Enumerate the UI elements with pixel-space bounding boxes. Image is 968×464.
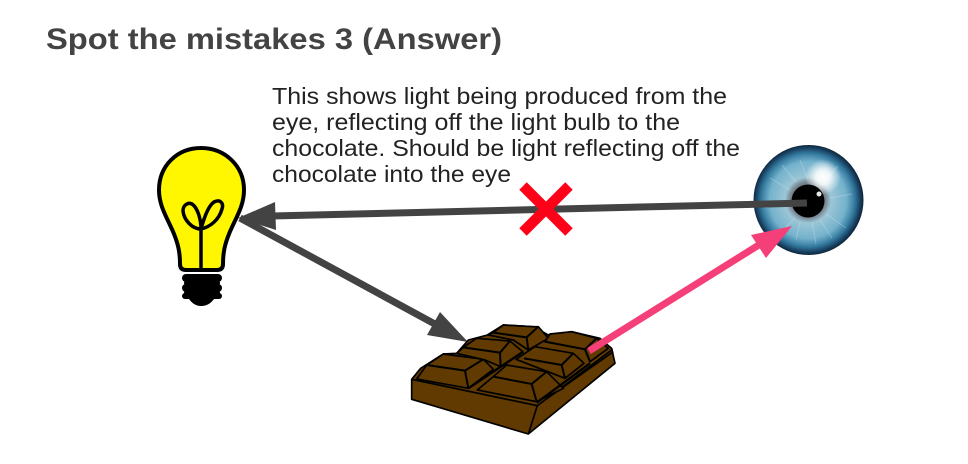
arrow: chocolate to eye — [589, 226, 792, 351]
title: Spot the mistakes 3 (Answer) — [46, 23, 502, 56]
explanation text: This shows light being produced from the — [272, 83, 727, 109]
explanation text: chocolate into the eye — [272, 161, 511, 187]
explanation text — [272, 83, 740, 187]
icon: red cross — [523, 186, 569, 232]
icon: eye — [754, 145, 864, 255]
explanation text: chocolate. Should be light reflecting off the — [272, 135, 740, 161]
explanation text: eye, reflecting off the light bulb to the — [272, 109, 680, 135]
arrow: bulb to chocolate — [240, 218, 468, 342]
icon: light bulb — [159, 148, 244, 306]
arrow: eye to bulb — [238, 202, 807, 230]
icon: chocolate bar — [412, 325, 615, 434]
